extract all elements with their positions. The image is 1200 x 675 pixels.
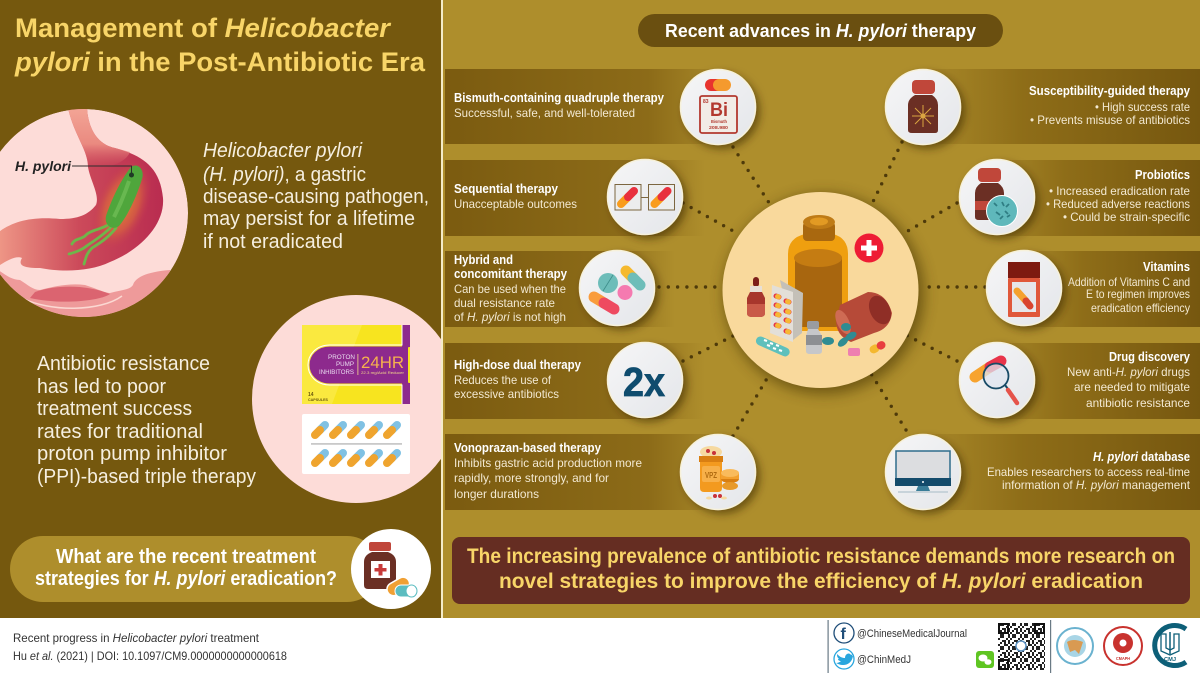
icon: facebook: f [840, 626, 846, 643]
icon: assorted pills [580, 250, 654, 326]
item: sequential therapy: Unacceptable outcomes [454, 197, 577, 211]
blister pack [302, 414, 410, 474]
heading pill [638, 14, 1003, 47]
PPI box: PROTON [328, 355, 355, 361]
icon: computer monitor [886, 434, 960, 510]
item: drug discovery [960, 342, 1190, 418]
item: bismuth-containing quadruple therapy: Successful, safe, and well-tolerated [454, 106, 635, 120]
icon: WeChat [976, 651, 994, 668]
blister packs [770, 280, 803, 342]
band backgrounds [445, 69, 1200, 510]
large amber bottle [788, 215, 848, 331]
PPI box: CAPSULES [308, 398, 329, 402]
dropper bottle [747, 277, 765, 317]
icon: two capsules in boxes [608, 160, 682, 234]
logo: CMJ: CMJ [1164, 657, 1176, 663]
pointer label [72, 166, 132, 173]
item: vonoprazan-based therapy: rapidly, more strongly, and for [454, 471, 609, 485]
item: vonoprazan-based therapy: longer durations [454, 487, 539, 501]
plus badge [854, 234, 884, 262]
icon: capsule under magnifying glass [960, 342, 1034, 418]
icon: bismuth element card [680, 70, 756, 144]
footer social links [828, 620, 967, 673]
item: probiotics: • Could be strain-specific [1063, 210, 1190, 224]
vial [806, 321, 822, 354]
text: pathogen description: may persist for a lifetime [203, 208, 415, 230]
item: vonoprazan-based therapy: Inhibits gastric acid production more [454, 456, 642, 470]
icon: medicine bottle and capsules [351, 529, 431, 609]
dotted connectors [659, 142, 985, 436]
footer social links: @ChineseMedicalJournal [857, 628, 967, 640]
icon: VPZ bottle [680, 434, 756, 510]
item: hybrid and concomitant therapy: Hybrid and [454, 253, 513, 267]
icon: 2x: 2x [623, 359, 665, 405]
strip of pills [755, 335, 791, 358]
text: antibiotic resistance: treatment success [37, 398, 192, 420]
PPI box: 22.3 mg/Acid Reducer [361, 371, 405, 375]
callout: question pill [10, 529, 431, 609]
item: high-dose dual therapy: Reduces the use of [454, 373, 552, 387]
panel: right recent advances [441, 0, 1200, 618]
center illustration: medicines [722, 192, 924, 394]
tipped red bottle with spilled pills [822, 292, 895, 356]
item: susceptibility-guided therapy: Susceptibility-guided therapy [1029, 84, 1190, 98]
item: susceptibility-guided therapy [886, 70, 1190, 144]
heading pill: Recent advances in H. pylori therapy [665, 21, 976, 41]
item: vonoprazan-based therapy [454, 434, 756, 510]
callout: conclusion banner [452, 537, 1190, 604]
item: probiotics: • Increased eradication rate [1049, 184, 1190, 198]
item: H. pylori database: H. pylori database [1093, 450, 1190, 464]
icon: twitter [834, 649, 854, 669]
text: antibiotic resistance [37, 353, 256, 488]
text: antibiotic resistance: Antibiotic resistance [37, 353, 210, 375]
PPI box: 24HR [361, 353, 404, 372]
PPI package illustration [252, 295, 460, 503]
item: vitamins: Vitamins [1143, 260, 1190, 274]
item: bismuth-containing quadruple therapy [454, 70, 756, 144]
item: H. pylori database: Enables researchers to access real-time [987, 465, 1190, 479]
item: hybrid and concomitant therapy: Can be used when the [454, 282, 566, 296]
item: probiotics [960, 160, 1190, 234]
logo: Chinese Medical Association [1057, 628, 1093, 664]
text: pathogen description: (H. pylori), a gastric [203, 164, 366, 186]
text: antibiotic resistance: proton pump inhibitor [37, 443, 227, 465]
item: susceptibility-guided therapy: • Prevents misuse of antibiotics [1030, 113, 1190, 127]
item: probiotics: • Reduced adverse reactions [1046, 197, 1190, 211]
footer citation [13, 631, 287, 663]
PPI box: PUMP [336, 362, 354, 368]
callout: conclusion banner: novel strategies to improve the efficiency of H. pylori eradication [499, 570, 1143, 593]
stomach illustration with H. pylori [0, 108, 188, 330]
item: hybrid and concomitant therapy: concomitant therapy [454, 267, 567, 281]
item: drug discovery: Drug discovery [1109, 350, 1190, 364]
item: hybrid and concomitant therapy: dual resistance rate [454, 296, 555, 310]
society logos [1050, 620, 1186, 673]
icon: 2x [608, 342, 682, 418]
item: drug discovery: are needed to mitigate [1074, 380, 1190, 394]
WeChat icon and QR code [976, 623, 1045, 670]
item: drug discovery: New anti-H. pylori drugs [1067, 365, 1190, 379]
bacterium flagella [69, 224, 116, 264]
PPI box [302, 325, 410, 404]
icon: bottle with bacteria dish [960, 160, 1034, 234]
icon: bismuth element card: 208.980 [709, 125, 729, 130]
intestine folds [0, 270, 170, 317]
item: high-dose dual therapy: excessive antibiotics [454, 387, 559, 401]
text: antibiotic resistance: rates for traditional [37, 421, 203, 443]
item: vitamins: eradication efficiency [1091, 301, 1190, 315]
item: drug discovery: antibiotic resistance [1086, 396, 1190, 410]
item: hybrid and concomitant therapy: of H. pylori is not high [454, 310, 566, 324]
footer citation: Hu et al. (2021) | DOI: 10.1097/CM9.0000000000000618 [13, 649, 287, 663]
title: Management of Helicobacter [15, 13, 392, 43]
item: vitamins [986, 250, 1190, 326]
icon: vitamin bottle [986, 250, 1062, 326]
text: antibiotic resistance: has led to poor [37, 376, 166, 398]
QR code [998, 623, 1045, 670]
item: susceptibility-guided therapy: • High success rate [1095, 100, 1190, 114]
item: bismuth-containing quadruple therapy: Bismuth-containing quadruple therapy [454, 91, 664, 105]
item: high-dose dual therapy: High-dose dual therapy [454, 358, 581, 372]
text: pathogen description: disease-causing pathogen, [203, 186, 429, 208]
icon: bismuth element card: Bismuth [711, 119, 727, 124]
item: sequential therapy [454, 160, 682, 234]
item: hybrid and concomitant therapy [454, 250, 654, 326]
text: pathogen description [203, 140, 429, 253]
item: H. pylori database [886, 434, 1191, 510]
icon: VPZ bottle: VPZ [705, 471, 717, 480]
text: pathogen description: if not eradicated [203, 231, 343, 253]
callout: question pill: strategies for H. pylori eradication? [35, 568, 337, 590]
icon: bottle with star [886, 70, 960, 144]
item: H. pylori database: information of H. pylori management [1002, 478, 1191, 492]
text: pathogen description: Helicobacter pylori [203, 140, 363, 162]
footer social links: @ChinMedJ [857, 654, 911, 666]
item: sequential therapy: Sequential therapy [454, 182, 558, 196]
item: probiotics: Probiotics [1135, 168, 1190, 182]
logo: CMAPH: CMAPH [1116, 656, 1130, 661]
callout: question pill: What are the recent treatment [56, 546, 316, 568]
text: antibiotic resistance: (PPI)-based triple therapy [37, 466, 256, 488]
PPI box: 14 [308, 392, 314, 398]
PPI box: INHIBITORS [319, 370, 354, 376]
footer citation: Recent progress in Helicobacter pylori treatment [13, 631, 260, 645]
item: vonoprazan-based therapy: Vonoprazan-based therapy [454, 441, 601, 455]
panel: left introduction [0, 0, 460, 618]
stomach [0, 108, 163, 270]
stomach illustration with H. pylori: H. pylori [15, 159, 71, 174]
icon: bismuth element card: Bi [710, 100, 728, 121]
item: high-dose dual therapy [454, 342, 682, 418]
icon: bismuth element card: 83 [703, 99, 709, 105]
bacterium body [106, 165, 143, 228]
title [14, 13, 426, 77]
title: pylori in the Post-Antibiotic Era [14, 47, 426, 77]
